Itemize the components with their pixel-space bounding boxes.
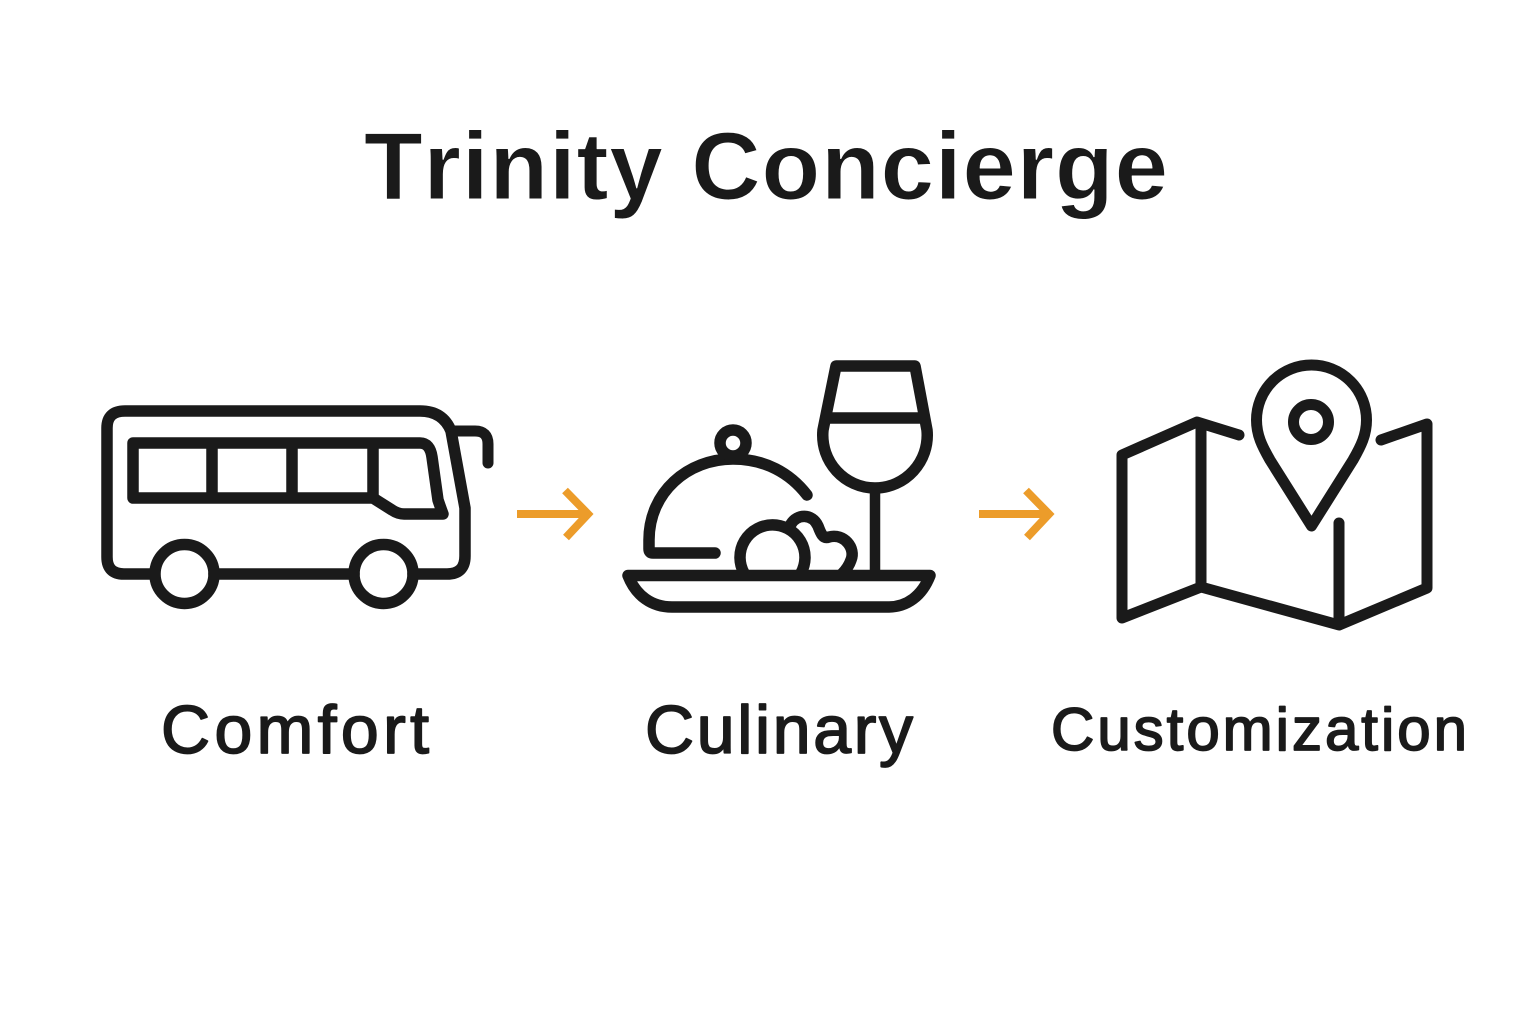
arrow: culinary to customization	[979, 490, 1049, 538]
icon: bus	[107, 411, 488, 604]
title: Trinity Concierge	[364, 113, 1168, 220]
arrow: comfort to culinary	[517, 490, 588, 538]
icon: cloche and wine glass	[628, 366, 930, 607]
label: Comfort: Comfort	[161, 692, 429, 768]
icon: map with pin	[1122, 365, 1427, 625]
label: Culinary: Culinary	[645, 692, 913, 768]
label: Customization: Customization	[1051, 696, 1467, 763]
